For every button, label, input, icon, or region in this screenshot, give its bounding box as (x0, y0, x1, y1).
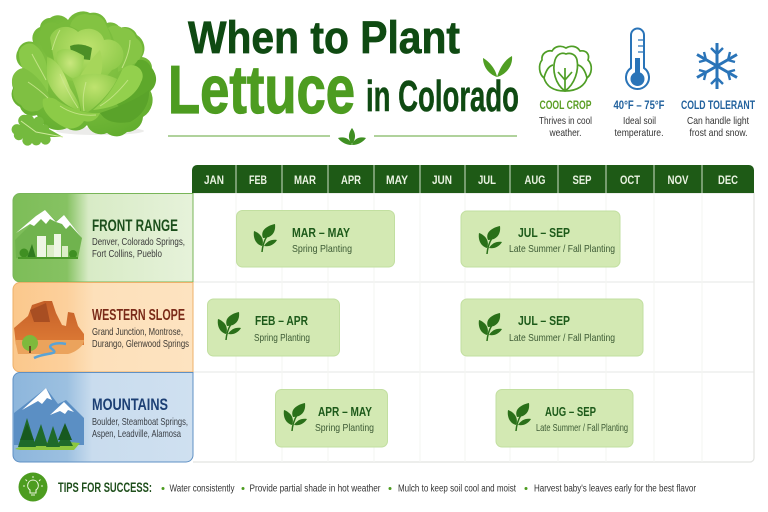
feature: cold tolerant: frost and snow. (690, 127, 748, 139)
month header: JUN (432, 173, 452, 187)
tips list: Provide partial shade in hot weather (250, 484, 381, 494)
bar: front range fall: Late Summer / Fall Planting (509, 243, 615, 255)
month header: JUL (478, 173, 496, 187)
lettuce illustration (12, 11, 156, 136)
bar: western slope fall: JUL – SEP (518, 314, 570, 328)
icon: mountains and pines (14, 388, 84, 450)
feature: soil temperature: 40°F – 75°F (614, 98, 664, 112)
tips heading: TIPS FOR SUCCESS: (58, 480, 152, 495)
bar: front range fall (461, 211, 620, 267)
feature: cool crop (539, 98, 592, 139)
month header: MAR (294, 173, 316, 187)
chart grid frame (193, 193, 754, 462)
panel: mountains (13, 372, 193, 462)
cities: mountains: Aspen, Leadville, Alamosa (92, 428, 181, 440)
cities: front range: Fort Collins, Pueblo (92, 248, 162, 260)
feature: soil temperature: temperature. (614, 127, 664, 139)
icon: western slope mesa and river (14, 301, 84, 358)
icon: thermometer (626, 28, 649, 89)
icon: cool crop lettuce outline (540, 46, 591, 91)
bar: mountains spring: Spring Planting (315, 422, 374, 434)
month header: NOV (668, 173, 688, 187)
bar: western slope spring: Spring Planting (254, 332, 310, 344)
bar: western slope fall: Late Summer / Fall Planting (509, 332, 615, 344)
month header: FEB (249, 173, 267, 187)
feature: cool crop: Thrives in cool (539, 115, 592, 127)
bar: mountains spring: APR – MAY (318, 405, 373, 419)
feature: soil temperature (614, 98, 664, 139)
cities: western slope (92, 326, 189, 350)
title divider (168, 128, 517, 145)
tips list: Water consistently (170, 484, 234, 494)
month header: SEP (572, 173, 592, 187)
title: When to Plant (188, 12, 460, 63)
heading: front range: FRONT RANGE (92, 216, 178, 235)
bar: front range fall: JUL – SEP (518, 226, 570, 240)
panel: front range (13, 194, 193, 282)
heading: western slope: WESTERN SLOPE (92, 307, 185, 324)
bar: mountains spring (276, 390, 388, 447)
icon: snowflake (697, 43, 737, 89)
tips list: Mulch to keep soil cool and moist (398, 484, 516, 494)
icon: tips light bulb (18, 472, 48, 502)
icon: front range mountains and city (15, 210, 82, 259)
bar: front range spring: MAR – MAY (292, 226, 351, 240)
cities: western slope: Durango, Glenwood Springs (92, 338, 189, 350)
cities: front range (92, 236, 185, 260)
heading: mountains: MOUNTAINS (92, 395, 168, 414)
month header (192, 165, 754, 193)
month header: AUG (524, 173, 546, 187)
bar: mountains fall: AUG – SEP (545, 405, 596, 419)
title: in Colorado (366, 72, 519, 121)
month header: JAN (204, 173, 224, 187)
month header: DEC (718, 173, 738, 187)
month header: APR (341, 173, 361, 187)
feature: cold tolerant: Can handle light (687, 115, 749, 127)
cities: front range: Denver, Colorado Springs, (92, 236, 185, 248)
feature: soil temperature: Ideal soil (623, 115, 656, 127)
tips list (162, 484, 697, 494)
feature: cool crop: COOL CROP (540, 98, 592, 112)
bar: front range spring: Spring Planting (292, 243, 352, 255)
feature: cold tolerant (681, 98, 755, 139)
bar: mountains fall: Late Summer / Fall Planting (536, 422, 628, 434)
bar: mountains fall (496, 390, 633, 447)
bar: western slope fall (461, 299, 643, 356)
feature: cool crop: weather. (549, 127, 582, 139)
cities: western slope: Grand Junction, Montrose, (92, 326, 183, 338)
month header: MAY (386, 173, 408, 187)
icon: title sprout (483, 56, 512, 77)
title: Lettuce (168, 52, 355, 128)
bar: front range spring (236, 210, 394, 267)
small lettuce leaf (12, 115, 63, 146)
bar: western slope spring (208, 299, 340, 356)
cities: mountains (92, 416, 188, 440)
cities: mountains: Boulder, Steamboat Springs, (92, 416, 188, 428)
month header: OCT (620, 173, 641, 187)
tips list: Harvest baby's leaves early for the best flavor (534, 484, 697, 494)
bar: western slope spring: FEB – APR (255, 314, 308, 328)
title (168, 12, 519, 128)
panel: western slope (13, 282, 193, 372)
